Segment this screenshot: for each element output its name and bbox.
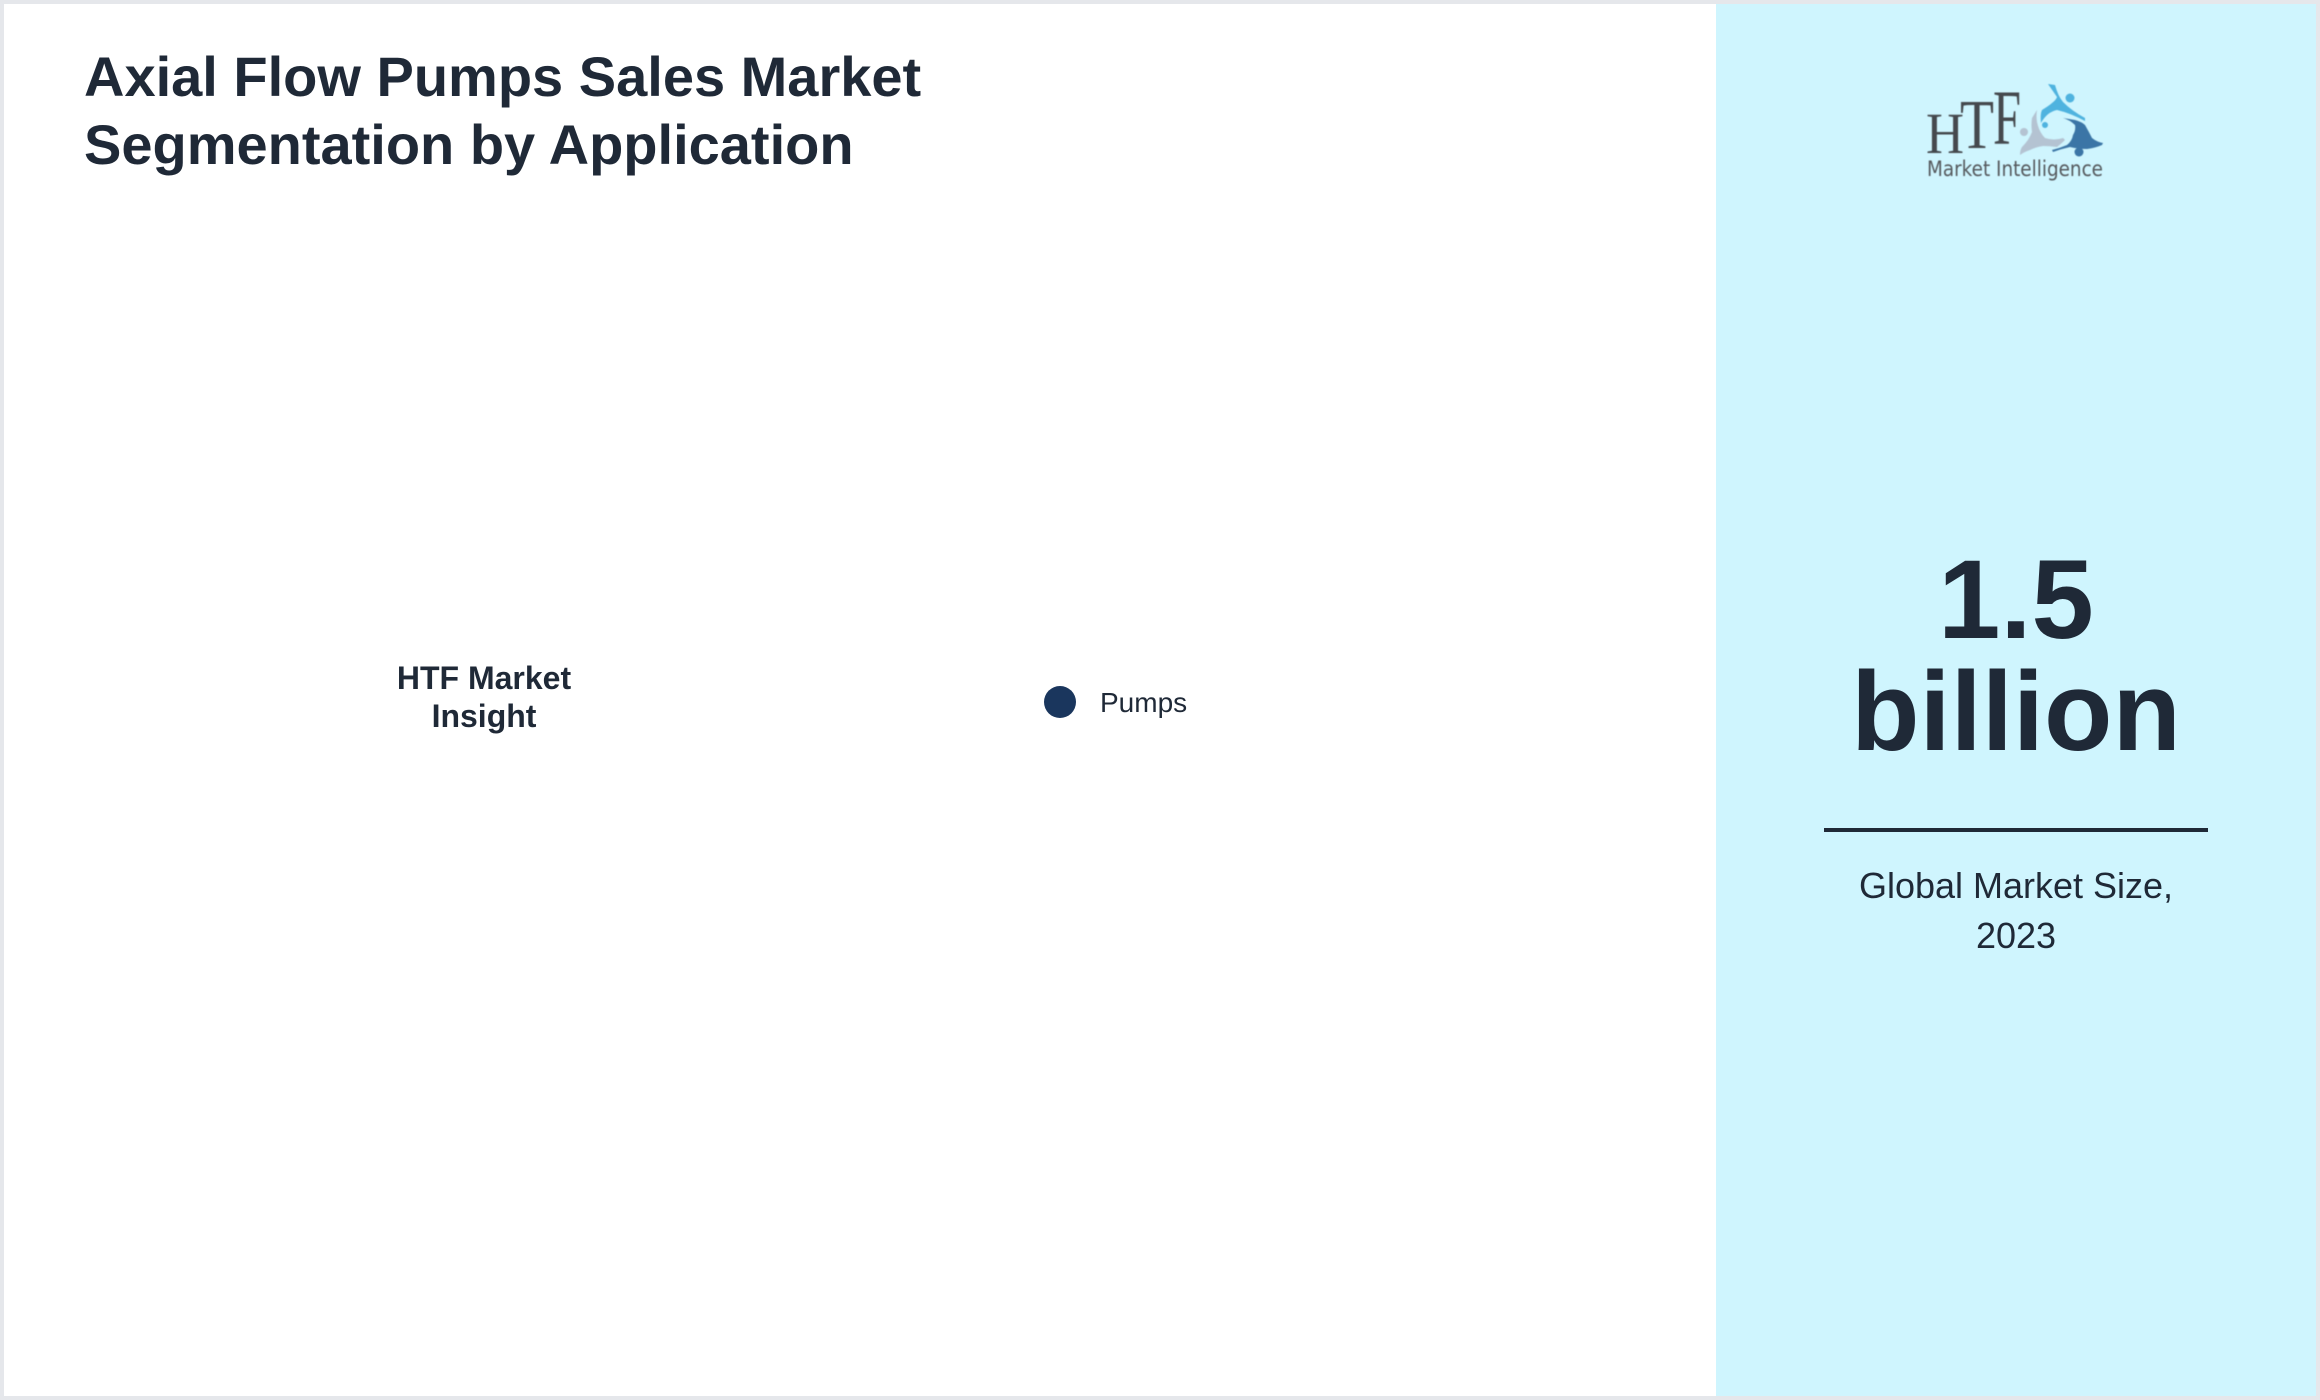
title: Axial Flow Pumps Sales Market [84, 45, 921, 108]
stat label: Global Market Size, [1859, 865, 2173, 906]
legend swatch [1044, 686, 1076, 718]
chart center label: HTF Market [397, 660, 571, 696]
logo: HTF Market Intelligence: T [1960, 87, 1994, 164]
panel: market size [1716, 4, 2316, 1396]
stat label: 2023 [1976, 915, 2056, 956]
logo: HTF Market Intelligence: H [1926, 101, 1964, 166]
stat label [1859, 865, 2173, 956]
stat: 1.5 billion [1851, 537, 2181, 774]
divider rule [1824, 828, 2208, 832]
stat: 1.5 billion: billion [1851, 649, 2181, 774]
legend text: Pumps [1100, 687, 1187, 718]
logo: HTF Market Intelligence [1926, 80, 2104, 182]
chart center label [397, 660, 571, 734]
chart center label: Insight [432, 698, 536, 734]
stat: 1.5 billion: 1.5 [1938, 537, 2094, 662]
legend: Pumps [1044, 686, 1187, 718]
title [84, 45, 921, 176]
title: Segmentation by Application [84, 113, 854, 176]
